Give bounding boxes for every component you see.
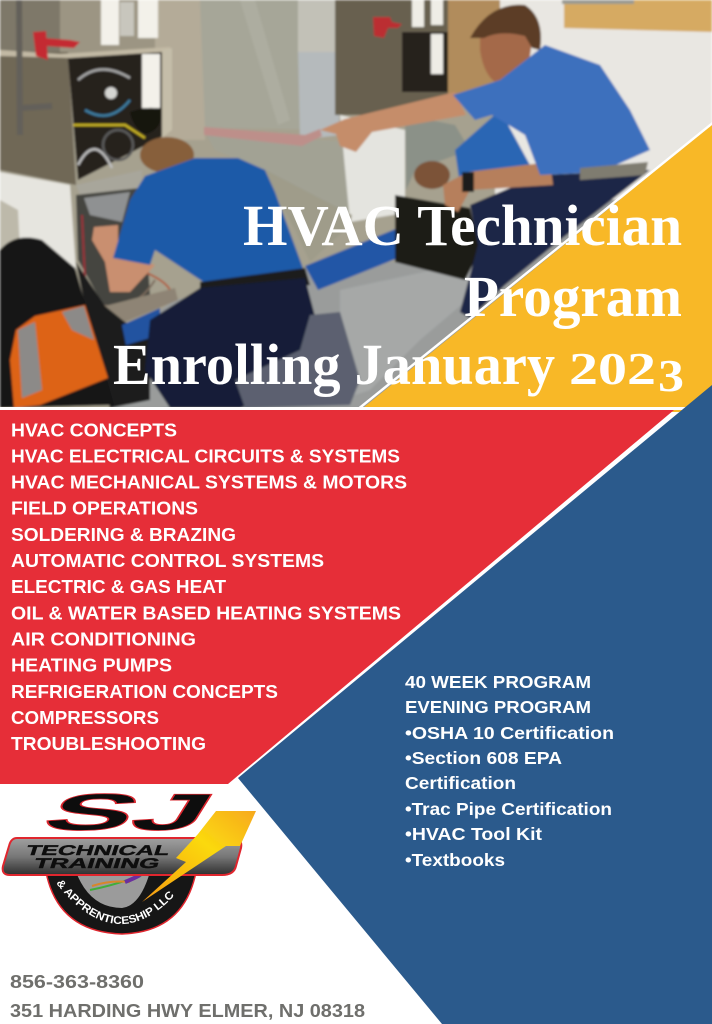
photo: technicians servicing furnaces <box>0 0 712 410</box>
photo: blue baseboard right <box>305 228 398 290</box>
photo: furnace side panel <box>162 48 172 138</box>
photo: lower furnace light panel <box>84 192 130 222</box>
address: 351 HARDING HWY ELMER, NJ 08318 <box>10 1001 365 1021</box>
photo: watch <box>462 172 474 192</box>
contact details <box>10 972 365 1021</box>
course list <box>11 420 407 754</box>
photo: beige floor patch <box>262 168 352 262</box>
course: oil and water: OIL & WATER BASED HEATING SYSTEMS <box>11 604 401 624</box>
photo: right technician belt <box>580 162 648 180</box>
photo: kneeling man head <box>414 161 450 189</box>
course: air conditioning: AIR CONDITIONING <box>11 630 196 650</box>
photo: backpack <box>0 238 114 408</box>
photo: compressor grey <box>405 115 470 190</box>
photo: grey rag <box>235 312 360 408</box>
photo: gas pipe <box>19 0 52 135</box>
logo: coloured wires <box>90 875 142 890</box>
photo: blue baseboard left <box>122 308 160 345</box>
photo: right furnace <box>335 0 448 115</box>
red panel <box>0 410 674 784</box>
title line three: digits 202: 202 <box>569 343 656 394</box>
photo: red valve <box>33 31 80 60</box>
detail: EPA line two: Certification <box>405 773 516 793</box>
course: controls: AUTOMATIC CONTROL SYSTEMS <box>11 551 324 571</box>
white divider band <box>0 407 712 410</box>
photo: right technician trousers <box>460 170 650 318</box>
logo: arc lettering: & APPRENTICESHIP LLC <box>57 880 174 924</box>
course: heating pumps: HEATING PUMPS <box>11 656 172 676</box>
logo: wire graphic window <box>76 872 150 908</box>
white edge of yellow triangle <box>355 122 712 410</box>
title line three: words: Enrolling January <box>113 332 555 397</box>
detail: Trac Pipe: •Trac Pipe Certification <box>405 799 612 819</box>
photo: lower duct <box>205 132 352 220</box>
photo: wood door frame <box>448 0 500 95</box>
photo: furnace top shelf <box>0 47 170 58</box>
detail: evening: EVENING PROGRAM <box>405 697 591 717</box>
phone number: 856-363-8360 <box>10 972 144 992</box>
logo: Technical lettering: TECHNICAL <box>24 843 172 859</box>
photo: right furnace cabinet <box>402 32 448 92</box>
title <box>113 193 684 401</box>
course: HVAC Concepts: HVAC CONCEPTS <box>11 420 177 440</box>
photo: left technician trousers <box>145 278 316 408</box>
logo: lower black arc <box>46 872 196 934</box>
photo: backpack orange <box>10 305 108 408</box>
detail: textbooks: •Textbooks <box>405 850 505 870</box>
title line one: HVAC Technician <box>243 193 682 258</box>
photo: duct bright panel <box>298 50 340 140</box>
photo: right pipes <box>412 0 443 74</box>
photo: duct mesh <box>204 127 322 146</box>
photo: left technician belt <box>200 268 310 296</box>
photo: lower furnace and wires <box>76 188 150 308</box>
photo: tan floor strip <box>105 288 178 322</box>
photo: wall behind left furnace <box>0 0 205 60</box>
photo: white wall at right <box>495 0 712 240</box>
photo: floor lighter <box>340 255 520 400</box>
photo: left technician arm <box>92 225 155 292</box>
course: refrigeration: REFRIGERATION CONCEPTS <box>11 682 278 702</box>
photo: left technician shirt <box>113 158 305 283</box>
detail: OSHA: •OSHA 10 Certification <box>405 723 614 743</box>
title line three: descending digit 3: 3 <box>658 350 684 401</box>
photo: right technician pointing arm <box>320 92 466 152</box>
course: heat: ELECTRIC & GAS HEAT <box>11 577 226 597</box>
photo: galvanized duct <box>200 0 340 130</box>
title line two: Program <box>464 264 682 329</box>
photo: left technician hair <box>140 137 194 173</box>
course: troubleshooting: TROUBLESHOOTING <box>11 734 206 754</box>
photo: right technician lower arm <box>443 162 553 212</box>
photo: beige wall <box>155 0 205 140</box>
photo: wiring <box>82 215 170 320</box>
yellow triangle <box>358 125 712 412</box>
logo: SJ Technical Training <box>2 784 256 935</box>
photo: dark area beside backpack <box>76 262 150 408</box>
photo: left furnace body <box>0 52 76 185</box>
logo: grey banner <box>3 838 241 875</box>
detail: EPA line one: •Section 608 EPA <box>405 748 562 768</box>
photo: furnace wires <box>73 69 145 168</box>
photo: white unit <box>340 115 405 222</box>
photo: right technician face <box>480 25 532 85</box>
photo: black toolbag <box>395 195 480 280</box>
photo: furnace cabinet <box>68 52 165 180</box>
photo: right technician hair <box>470 5 541 50</box>
photo: dark wall corner <box>0 0 60 52</box>
course: field operations: FIELD OPERATIONS <box>11 498 198 518</box>
logo: Training lettering: TRAINING <box>32 856 162 872</box>
photo: pipe elbow <box>130 108 162 134</box>
photo: white cabinet bottom left <box>0 172 76 270</box>
course: soldering: SOLDERING & BRAZING <box>11 525 236 545</box>
photo: duct cross crease <box>240 0 290 125</box>
course: compressors: COMPRESSORS <box>11 708 159 728</box>
photo: electrical box <box>562 0 634 4</box>
detail: duration: 40 WEEK PROGRAM <box>405 672 591 692</box>
photo: right technician shirt <box>453 45 650 175</box>
detail: tool kit: •HVAC Tool Kit <box>405 824 542 844</box>
photo: kneeling man shirt <box>455 110 530 185</box>
photo: wood board <box>564 0 712 32</box>
photo: white exhaust pipes <box>101 0 160 108</box>
blue panel <box>238 385 712 1024</box>
program details <box>405 672 614 870</box>
course: mechanical: HVAC MECHANICAL SYSTEMS & MOTORS <box>11 472 407 492</box>
photo: backpack grey panel <box>18 322 42 398</box>
photo: right red valve <box>373 17 402 38</box>
photo: floor <box>0 200 712 410</box>
photo: silver plate <box>76 170 142 195</box>
logo: lightning bolt <box>142 811 256 902</box>
course: electrical: HVAC ELECTRICAL CIRCUITS & SYSTEMS <box>11 446 400 466</box>
photo: duct flap <box>298 0 340 52</box>
logo: SJ letters: SJ <box>31 784 227 842</box>
